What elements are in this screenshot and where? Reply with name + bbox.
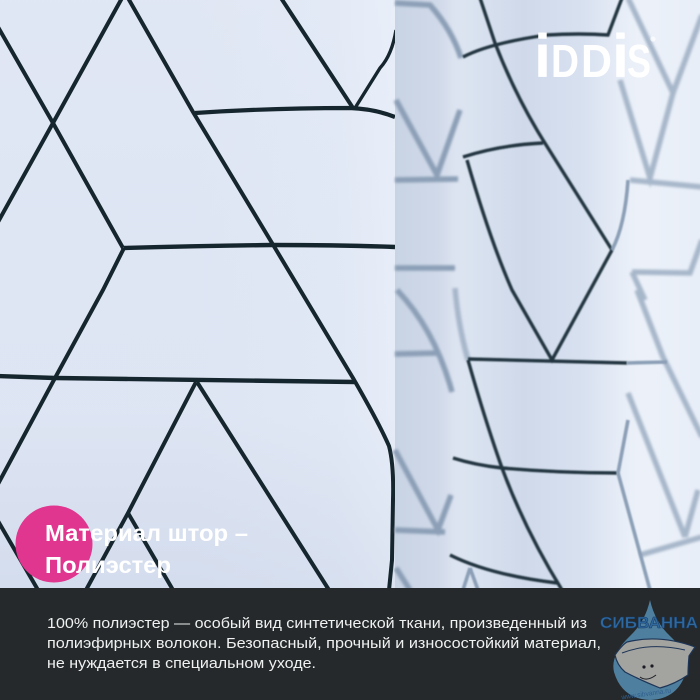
logo: iddis: D bbox=[551, 35, 579, 87]
logo: iddis: i bbox=[534, 22, 551, 90]
label: brand name: СИБВАННА bbox=[600, 615, 698, 632]
logo: iddis: S bbox=[627, 35, 651, 87]
panel: blurred background curtain folds bbox=[395, 0, 700, 590]
icon: sibvanna watermark bbox=[600, 600, 698, 700]
text block: description: 100% полиэстер — особый вид синтетической ткани, произведенный из bbox=[47, 615, 587, 632]
logo: iddis: D bbox=[581, 35, 612, 87]
icon: pink circle behind heading bbox=[16, 506, 92, 582]
far right fold pattern bbox=[455, 0, 700, 555]
text block: description: не нуждается в специальном уходе. bbox=[47, 655, 316, 672]
text block: description: полиэфирных волокон. Безопасный, прочный и износостойкий материал, bbox=[47, 635, 601, 652]
main fold pattern bbox=[450, 0, 627, 590]
heading: Материал штор – bbox=[45, 520, 248, 546]
logo: iddis: i bbox=[612, 22, 629, 90]
panel: dark description bar bbox=[0, 588, 700, 700]
far left fold pattern bbox=[395, 3, 461, 590]
logo: iddis bbox=[534, 22, 656, 90]
icon: bathtub bbox=[615, 639, 695, 688]
panel: curtain front fold with geometric pattern bbox=[0, 0, 396, 590]
icon: water drop bbox=[613, 600, 687, 700]
heading: Полиэстер bbox=[45, 552, 171, 578]
